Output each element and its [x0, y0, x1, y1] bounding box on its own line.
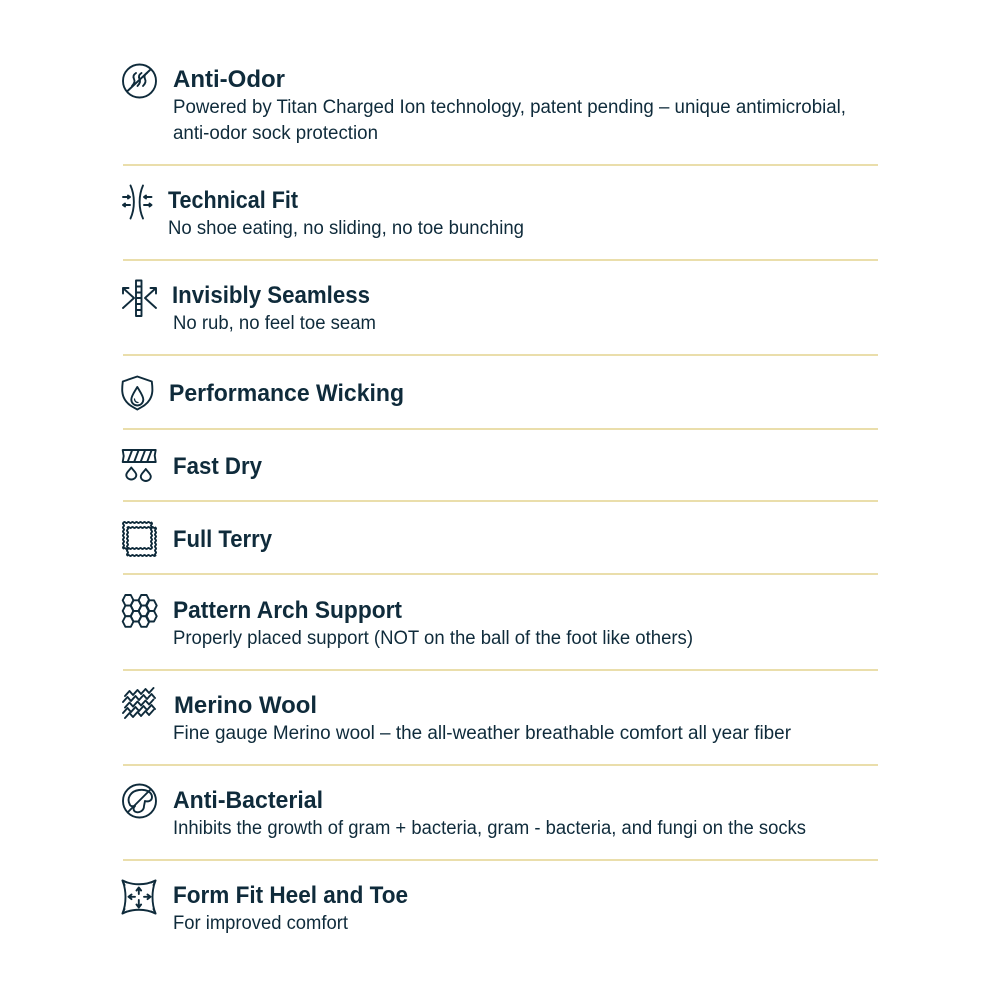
icon: shield with water drop	[122, 376, 152, 410]
panel: Form Fit Heel and Toe	[122, 880, 408, 934]
heading: Pattern Arch Support	[173, 597, 402, 624]
heading: Performance Wicking	[169, 380, 404, 407]
heading: Full Terry	[173, 526, 273, 553]
text block: Powered by Titan Charged Ion technology, patent pending – unique antimicrobial,	[173, 97, 846, 118]
heading: Form Fit Heel and Toe	[173, 882, 408, 909]
icon: seam with diverging arrows	[123, 280, 156, 316]
text block: Properly placed support (NOT on the ball of the foot like others)	[173, 628, 693, 649]
text block: No shoe eating, no sliding, no toe bunching	[168, 218, 524, 239]
text block: anti-odor sock protection	[173, 123, 378, 144]
panel: Invisibly Seamless	[123, 280, 376, 334]
icon: overlapping terry squares	[123, 522, 156, 556]
panel: Performance Wicking	[122, 376, 404, 410]
heading: Anti-Bacterial	[173, 787, 323, 814]
text block: Fine gauge Merino wool – the all-weather breathable comfort all year fiber	[173, 723, 792, 744]
icon: woven wool pattern	[123, 688, 155, 718]
heading: Technical Fit	[168, 187, 298, 214]
panel: Anti-Bacterial	[123, 784, 806, 839]
panel: Anti-Odor	[123, 64, 846, 144]
panel: Technical Fit	[123, 186, 524, 239]
heading: Fast Dry	[173, 453, 263, 480]
icon: crossed-out odor waves	[123, 64, 156, 98]
icon: inward curves with arrows	[123, 186, 152, 218]
icon: honeycomb	[123, 595, 157, 627]
icon: crossed-out mushroom	[123, 784, 156, 818]
heading: Merino Wool	[174, 692, 317, 719]
text block: Inhibits the growth of gram + bacteria, gram - bacteria, and fungi on the socks	[173, 818, 806, 839]
icon: fabric with drops	[123, 450, 156, 481]
heading: Anti-Odor	[173, 66, 285, 93]
text block: For improved comfort	[173, 913, 349, 934]
text block	[173, 97, 846, 144]
icon: stretched square with arrows	[122, 880, 156, 914]
text block: No rub, no feel toe seam	[173, 313, 376, 334]
panel: Pattern Arch Support	[123, 595, 693, 649]
panel: Full Terry	[123, 522, 273, 556]
panel: Fast Dry	[123, 450, 263, 481]
panel: Merino Wool	[123, 688, 792, 744]
heading: Invisibly Seamless	[172, 282, 370, 309]
